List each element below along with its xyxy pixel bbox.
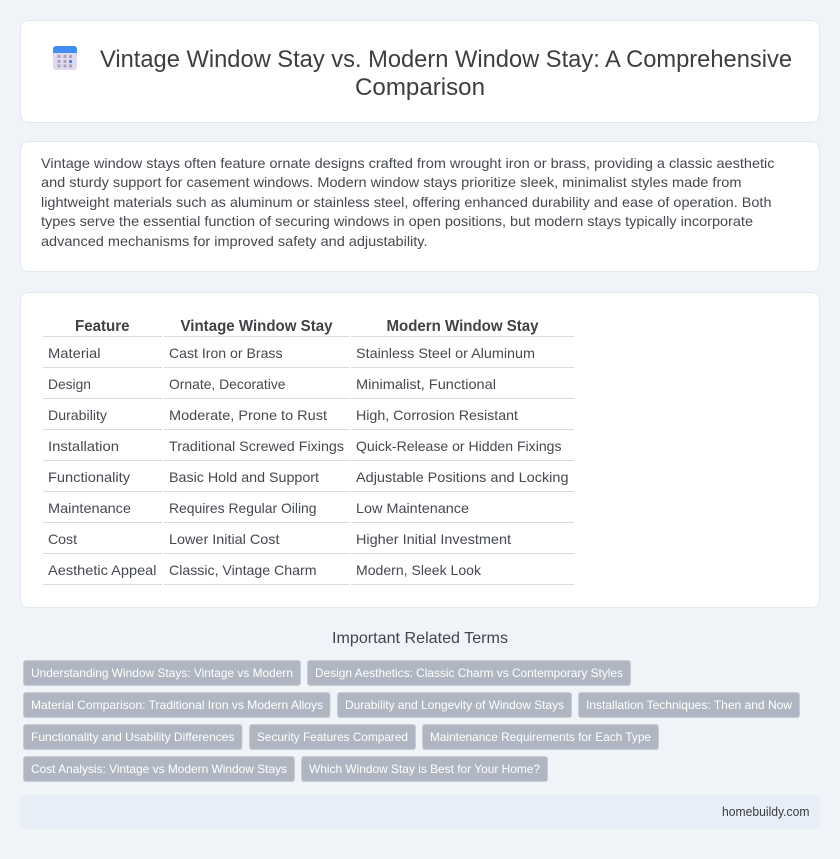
- table row: aesthetic appeal: Classic, Vintage Charm: [169, 562, 316, 578]
- title: [100, 46, 792, 101]
- tag: [24, 724, 242, 750]
- table row: installation: [48, 438, 562, 454]
- table row: aesthetic appeal: Modern, Sleek Look: [356, 562, 482, 578]
- table row: maintenance: [48, 500, 469, 516]
- table row: maintenance: Low Maintenance: [356, 500, 469, 516]
- table header row: [75, 318, 539, 335]
- tag: Which Window Stay is Best for Your Home?: [309, 762, 540, 776]
- panel: introduction text: lightweight materials such as aluminum or stainless steel, offering enhanced durability and ease of operation. Both: [41, 194, 772, 210]
- tag: Functionality and Usability Differences: [31, 730, 235, 744]
- related term tags: [24, 660, 800, 782]
- table row: durability: Durability: [48, 407, 107, 423]
- table row: durability: Moderate, Prone to Rust: [169, 407, 327, 423]
- table row: installation: Traditional Screwed Fixings: [169, 438, 344, 454]
- table row: functionality: Basic Hold and Support: [169, 469, 319, 485]
- tag: Cost Analysis: Vintage vs Modern Window Stays: [31, 762, 287, 776]
- footer: [20, 795, 820, 829]
- table row: durability: [48, 407, 518, 423]
- tag: [422, 724, 658, 750]
- table row: design: Minimalist, Functional: [356, 376, 496, 392]
- icon: calendar grid: [53, 46, 77, 70]
- table row: installation: Quick-Release or Hidden Fixings: [356, 438, 562, 454]
- tag: [338, 692, 572, 718]
- table header row: Vintage Window Stay: [180, 318, 333, 335]
- table row: functionality: Functionality: [48, 469, 130, 485]
- tag: Security Features Compared: [257, 730, 408, 744]
- tag: [308, 660, 630, 686]
- panel: introduction text: Vintage window stays often feature ornate designs crafted from wrought iron or brass, providing a classic aesthetic: [41, 155, 775, 171]
- heading: important related terms: Important Related Terms: [332, 630, 508, 647]
- table row: design: Ornate, Decorative: [169, 376, 286, 392]
- table row: aesthetic appeal: Aesthetic Appeal: [48, 562, 156, 578]
- table row: durability: High, Corrosion Resistant: [356, 407, 518, 423]
- table header row: Feature: [75, 318, 130, 335]
- table row: maintenance: Maintenance: [48, 500, 131, 516]
- tag: [250, 724, 416, 750]
- table row: material: Material: [48, 345, 100, 361]
- table row: maintenance: Requires Regular Oiling: [169, 500, 316, 516]
- table row: material: Cast Iron or Brass: [169, 345, 282, 361]
- table row: design: Design: [48, 376, 91, 392]
- tag: [24, 660, 300, 686]
- panel: comparison table: [20, 292, 820, 608]
- panel: header: [20, 20, 820, 122]
- tag: Understanding Window Stays: Vintage vs Modern: [31, 666, 293, 680]
- tag: Material Comparison: Traditional Iron vs Modern Alloys: [31, 698, 323, 712]
- table row: installation: Installation: [48, 438, 119, 454]
- panel: introduction text: and sturdy support for casement windows. Modern window stays prioritize sleek, minimalist styles made from: [41, 174, 742, 190]
- table row: material: [48, 345, 535, 361]
- panel: introduction text: types serve the essential function of securing windows in open positions, but modern stays typically incorporate: [41, 213, 753, 229]
- tag: [24, 692, 330, 718]
- title: Comparison: [355, 74, 485, 101]
- title: Vintage Window Stay vs. Modern Window Stay: A Comprehensive: [100, 46, 792, 73]
- tag: Design Aesthetics: Classic Charm vs Contemporary Styles: [315, 666, 623, 680]
- table row: cost: Cost: [48, 531, 77, 547]
- table row: cost: [48, 531, 511, 547]
- table row: cost: Lower Initial Cost: [169, 531, 280, 547]
- table header row: Modern Window Stay: [386, 318, 539, 335]
- footer: homebuildy.com: [722, 804, 810, 819]
- tag: [302, 756, 548, 782]
- table row: design: [48, 376, 496, 392]
- tag: Durability and Longevity of Window Stays: [345, 698, 564, 712]
- tag: Installation Techniques: Then and Now: [586, 698, 792, 712]
- table row: functionality: [48, 469, 568, 485]
- table row: aesthetic appeal: [48, 562, 482, 578]
- table row: cost: Higher Initial Investment: [356, 531, 511, 547]
- tag: [578, 692, 800, 718]
- tag: [24, 756, 294, 782]
- table row: material: Stainless Steel or Aluminum: [356, 345, 535, 361]
- table row: functionality: Adjustable Positions and Locking: [356, 469, 568, 485]
- panel: introduction text: [20, 142, 820, 272]
- panel: introduction text: advanced mechanisms for improved safety and adjustability.: [41, 233, 428, 249]
- tag: Maintenance Requirements for Each Type: [430, 730, 651, 744]
